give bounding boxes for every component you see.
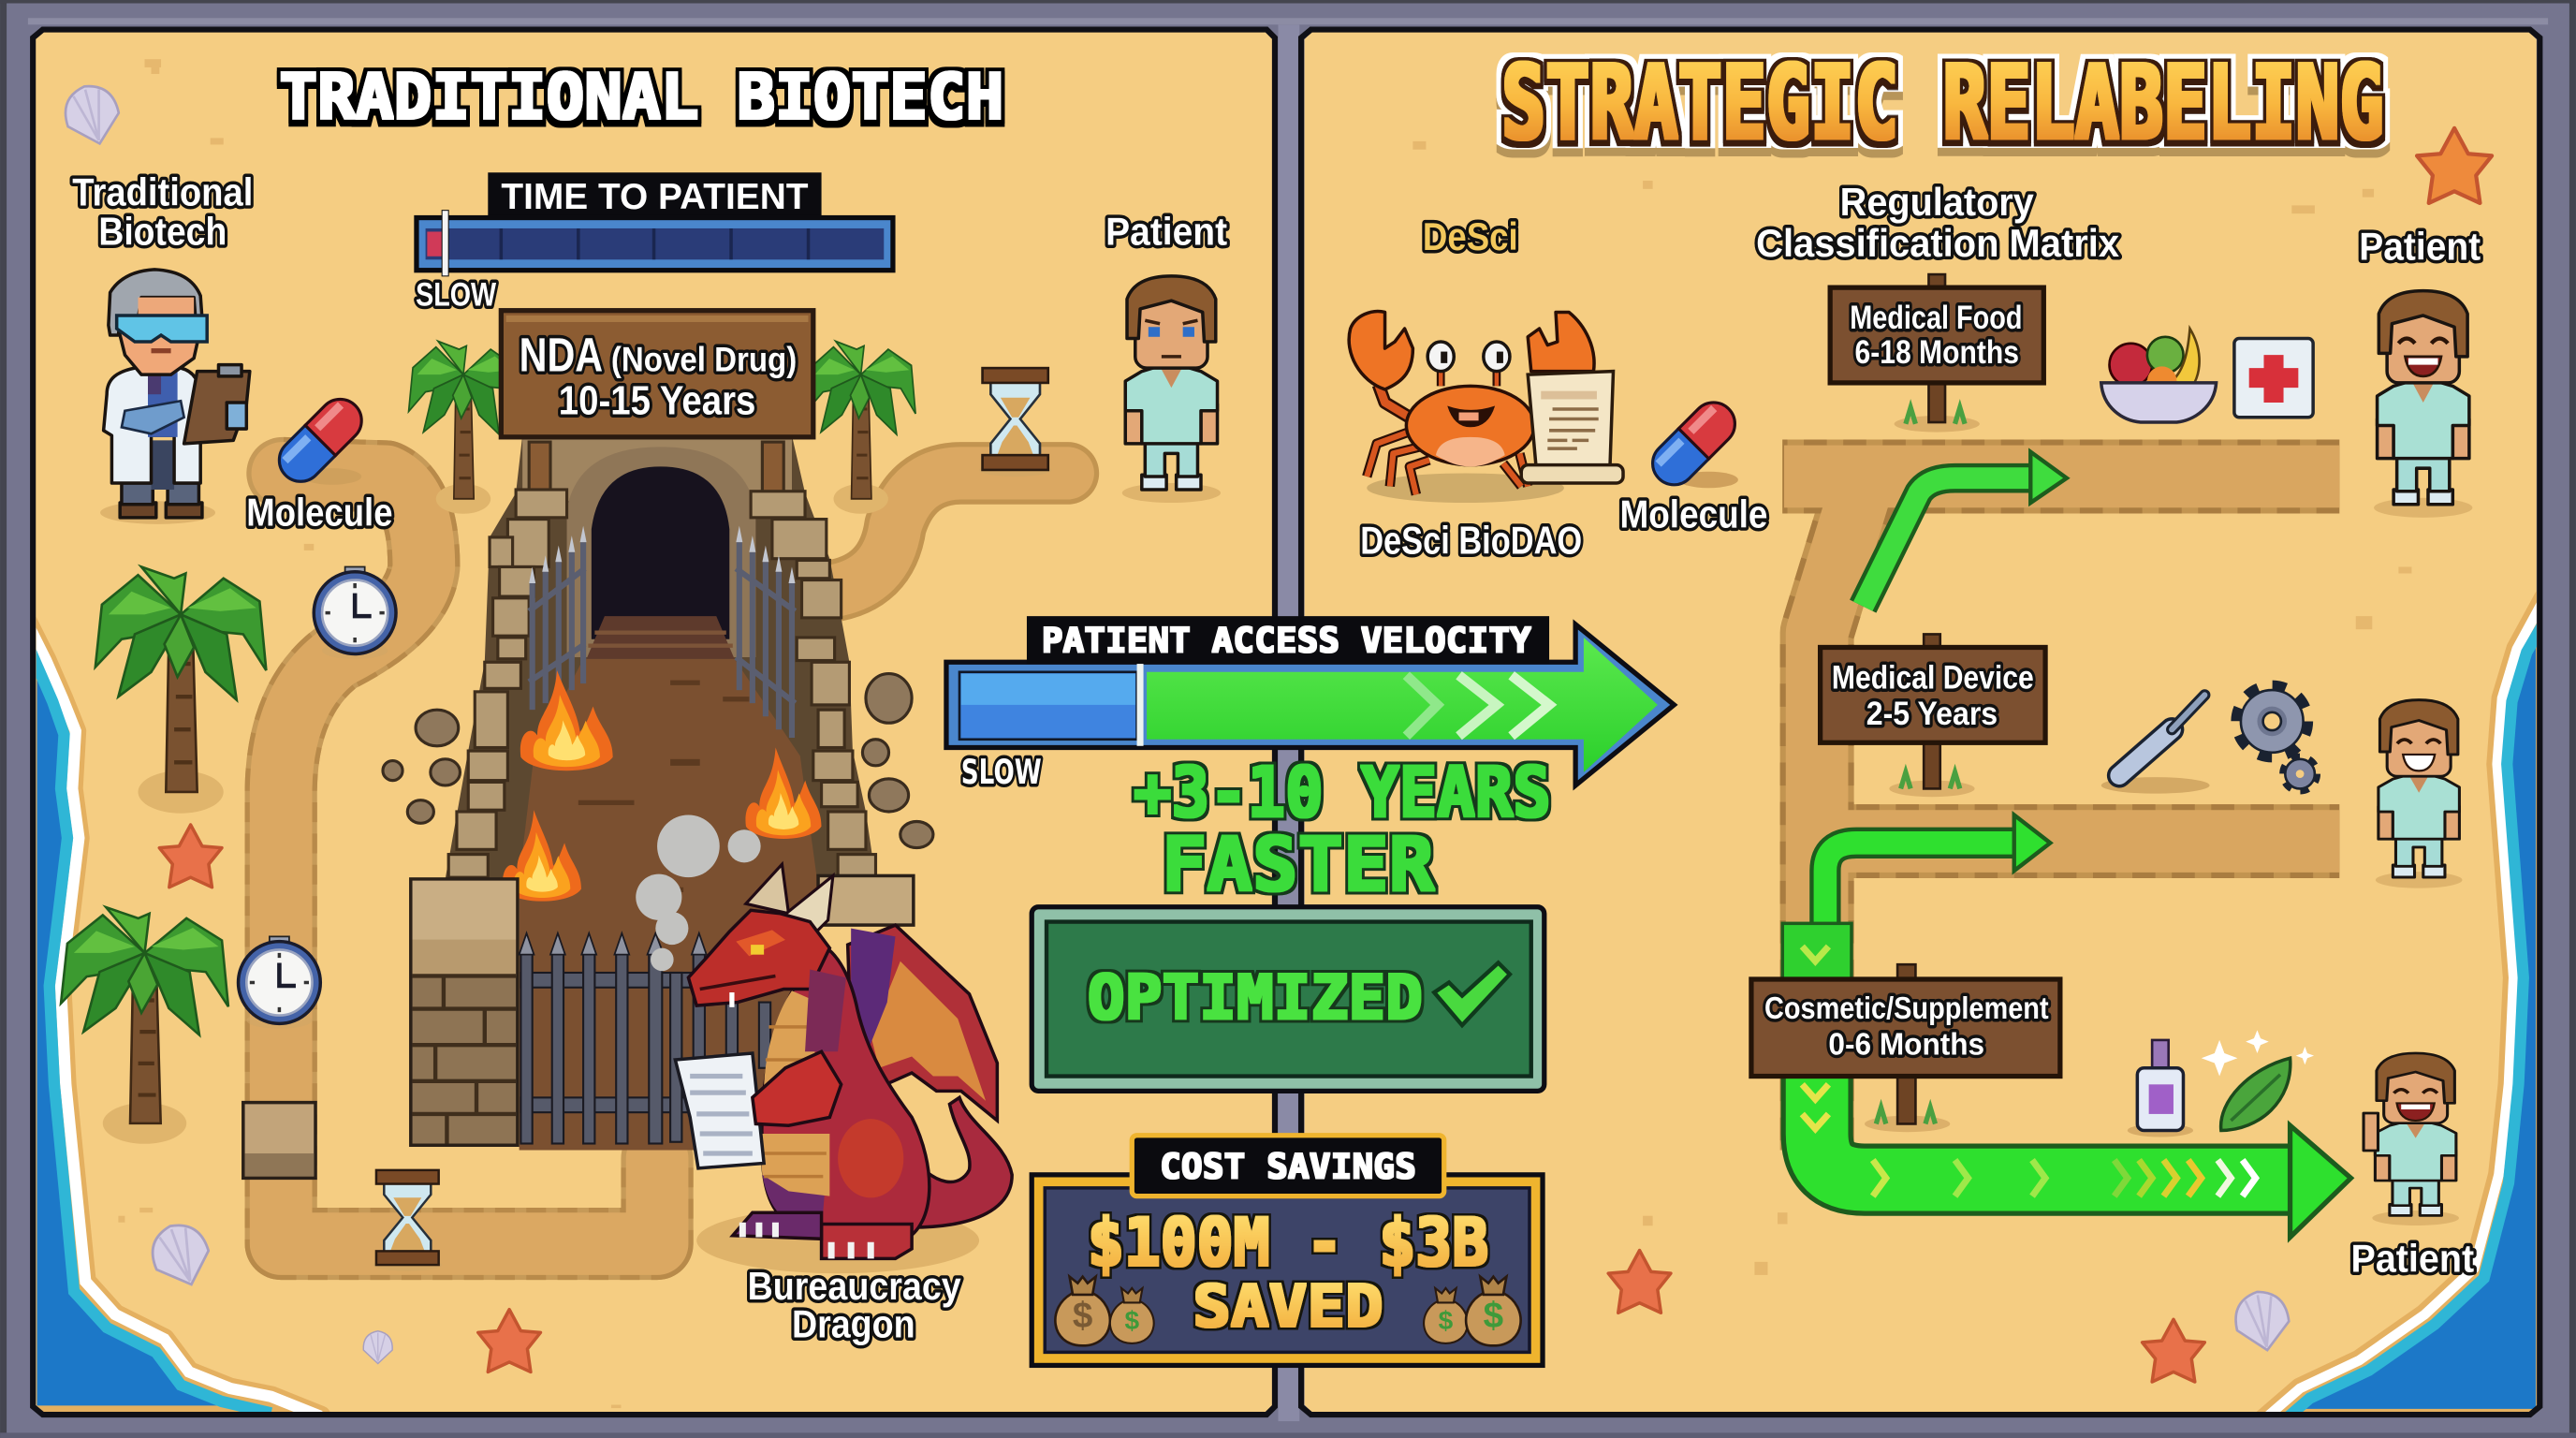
sign: NDA: (Novel Drug) <box>611 341 797 379</box>
icon: money bags left: $ <box>1073 1296 1092 1336</box>
optimized status box: OPTIMIZED <box>1088 963 1423 1034</box>
label bureaucracy dragon: Bureaucracy <box>748 1264 961 1308</box>
icon: money bags left: $ <box>1124 1306 1139 1335</box>
green arrow: medical food <box>1863 452 2067 607</box>
sign post: medical device <box>1821 634 2045 797</box>
icon: money bags right: $ <box>1484 1296 1503 1336</box>
sign post: cosmetic supplement <box>1751 964 2060 1132</box>
faster callout: FASTER <box>1162 822 1435 908</box>
time to patient bar <box>414 172 896 313</box>
icon: money bags right <box>1424 1277 1521 1345</box>
sign post: medical device: 2-5 Years <box>1866 696 1998 732</box>
sign post: medical device: Medical Device <box>1832 659 2034 696</box>
panel title left: TRADITIONAL BIOTECH <box>279 60 1003 133</box>
sign post: medical food: 6-18 Months <box>1854 334 2019 371</box>
cost savings box: $100M - $3B <box>1088 1204 1488 1281</box>
icon: money bags left <box>1055 1277 1154 1345</box>
ocean right <box>2263 594 2556 1430</box>
starfish left upper <box>159 825 222 888</box>
ocean left <box>20 621 320 1416</box>
rocks <box>383 674 933 848</box>
label patient top right: Patient <box>2359 224 2481 268</box>
starfish bottom right <box>2143 1319 2204 1382</box>
tunnel opening stone surround <box>567 447 755 657</box>
label regulatory classification matrix <box>1756 180 2120 265</box>
green arrow: cosmetic supplement <box>1782 923 2351 1238</box>
thermometer icon <box>2101 695 2210 794</box>
cost savings box <box>1032 1136 1543 1365</box>
palm trees behind sign <box>409 342 915 514</box>
dragon body <box>733 945 929 1258</box>
pill left <box>271 390 371 491</box>
patient happy middle <box>2376 700 2462 888</box>
label traditional biotech: Traditional <box>72 169 253 213</box>
sign post: medical food: Medical Food <box>1850 300 2022 336</box>
fire 2 <box>745 748 822 839</box>
patient access velocity bar: PATIENT ACCESS VELOCITY <box>1042 621 1532 661</box>
clock lower <box>239 936 320 1029</box>
patient sad <box>1122 276 1221 503</box>
dragon head <box>688 864 846 1051</box>
tunnel floor <box>520 659 818 1151</box>
sand speckles left <box>118 59 621 1408</box>
time to patient bar: SLOW <box>416 276 497 313</box>
label traditional biotech <box>72 169 253 253</box>
label molecule left: Molecule <box>246 491 393 535</box>
scientist <box>100 270 250 524</box>
cost savings box: COST SAVINGS <box>1160 1146 1416 1186</box>
leaf and sparkles icon <box>2202 1030 2314 1130</box>
arch and walls <box>446 435 875 879</box>
label desci: DeSci <box>1423 214 1518 258</box>
label regulatory classification matrix: Regulatory <box>1840 180 2034 224</box>
faster callout: +3-10 YEARS <box>1134 754 1551 833</box>
dirt path branches <box>1782 477 2339 1151</box>
sign: NDA <box>501 311 813 437</box>
icon: money bags right: $ <box>1439 1306 1454 1335</box>
clock upper <box>314 566 396 659</box>
optimized status box <box>1032 907 1544 1091</box>
shell bottom right <box>2231 1287 2293 1355</box>
hourglass near patient <box>979 368 1051 477</box>
open gates <box>529 526 795 738</box>
label patient left: Patient <box>1105 209 1227 253</box>
panel: traditional biotech <box>20 31 1273 1416</box>
sign: NDA: 10-15 Years <box>559 377 755 423</box>
patient access velocity bar <box>946 616 1674 792</box>
sand background left <box>35 31 1273 1413</box>
stone block <box>243 1103 315 1178</box>
fruit bowl icon <box>2101 329 2217 422</box>
sand background right <box>1305 31 2537 1413</box>
patient happy bottom waving <box>2364 1053 2459 1225</box>
scroll <box>1521 372 1623 483</box>
crab with scroll <box>1349 312 1623 503</box>
iron fence <box>520 933 770 1143</box>
dragon <box>675 864 1012 1273</box>
label traditional biotech: Biotech <box>98 209 227 253</box>
dirt path: tunnel to patient <box>829 473 1068 592</box>
shell bottom <box>144 1217 217 1294</box>
sign post: cosmetic supplement: Cosmetic/Supplement <box>1764 991 2049 1026</box>
smoke <box>636 814 761 971</box>
dragon tail <box>907 1097 1012 1227</box>
stones <box>448 442 875 877</box>
patient access velocity bar: SLOW <box>961 752 1042 792</box>
palm tree lower <box>61 907 228 1144</box>
dragon paper <box>675 1053 764 1168</box>
fire 1 <box>520 670 613 770</box>
sign post: cosmetic supplement: 0-6 Months <box>1828 1028 1984 1063</box>
starfish left lower <box>478 1310 540 1372</box>
brick pillar left <box>411 879 518 1145</box>
time to patient bar: TIME TO PATIENT <box>501 177 809 217</box>
dragon arm <box>753 1051 842 1125</box>
label patient bottom right: Patient <box>2351 1236 2474 1280</box>
shell top left <box>59 80 125 151</box>
pebble shell <box>363 1331 392 1363</box>
label regulatory classification matrix: Classification Matrix <box>1756 221 2120 265</box>
dirt path: molecule to gate <box>281 473 657 1244</box>
hourglass on path lower <box>373 1170 442 1271</box>
dragon wing <box>848 925 997 1134</box>
tunnel gate structure <box>446 435 875 1151</box>
crab legs <box>1367 385 1528 494</box>
serum bottle icon <box>2128 1040 2193 1137</box>
icon: check mark <box>1434 962 1510 1025</box>
label molecule right: Molecule <box>1620 492 1767 536</box>
crab claws <box>1349 312 1594 389</box>
panel: strategic relabeling <box>1305 31 2556 1430</box>
starfish centre bottom <box>1608 1251 1671 1313</box>
sign post: medical food <box>1830 274 2043 433</box>
cost savings box: SAVED <box>1193 1273 1383 1340</box>
label desci biodao: DeSci BioDAO <box>1360 518 1582 562</box>
sand speckles right <box>1412 141 2411 1275</box>
pill right <box>1644 393 1744 493</box>
gear icons <box>2237 687 2317 790</box>
label bureaucracy dragon <box>748 1264 961 1346</box>
palm tree upper <box>95 566 266 814</box>
starfish top right <box>2417 128 2492 203</box>
fire 3 <box>503 810 581 902</box>
green arrow: medical device <box>1825 814 2050 923</box>
label bureaucracy dragon: Dragon <box>792 1302 915 1346</box>
sign: NDA: NDA <box>520 329 603 382</box>
medical cross icon <box>2234 339 2313 418</box>
faster callout <box>1134 754 1551 908</box>
patient happy top <box>2374 291 2472 518</box>
brick pillar right <box>818 875 914 925</box>
